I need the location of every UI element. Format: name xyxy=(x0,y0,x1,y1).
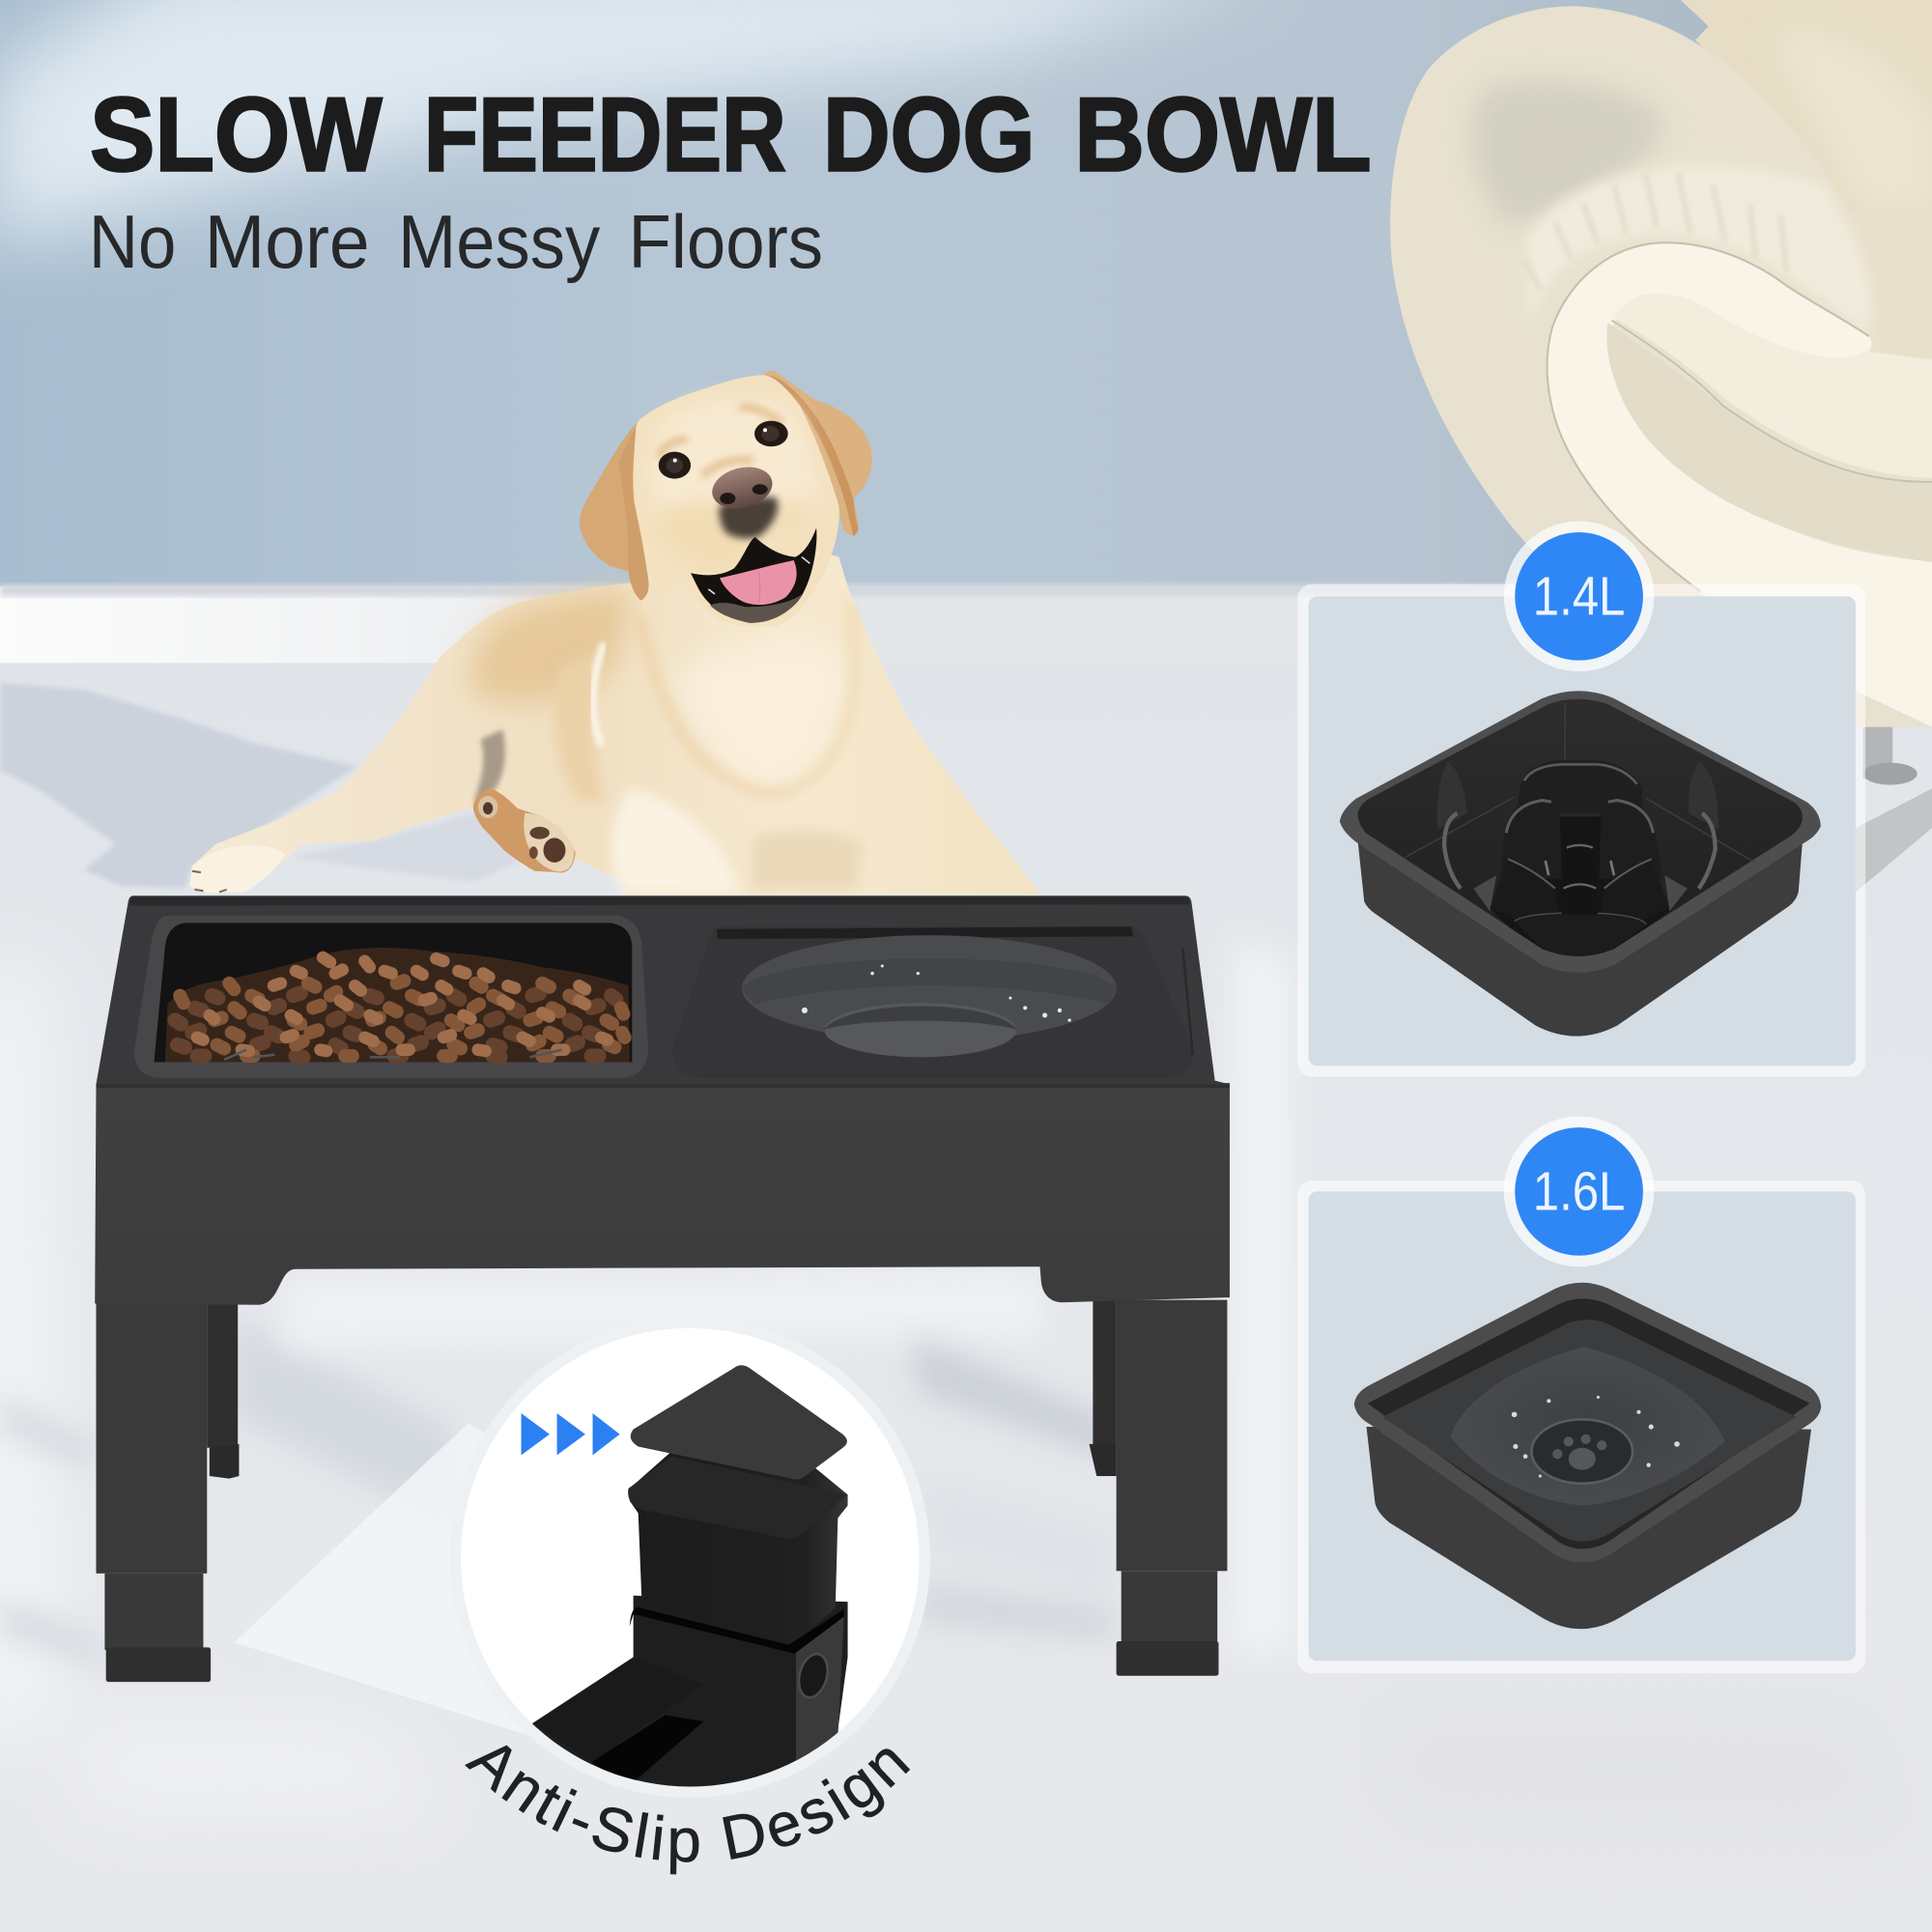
panel: 1.4L bowl xyxy=(1297,522,1865,1077)
title: BOWL xyxy=(1074,76,1372,194)
card frame xyxy=(1297,584,1865,1077)
title: SLOW xyxy=(90,76,382,194)
elevated stand xyxy=(95,895,1230,1682)
dog xyxy=(189,371,1040,895)
stand top surface xyxy=(96,895,1230,1084)
left bowl with kibble xyxy=(134,916,648,1078)
stand back legs xyxy=(207,1300,1117,1479)
right bowl water tray xyxy=(672,926,1193,1078)
stand apron xyxy=(95,1083,1230,1305)
anti-slip pad xyxy=(631,1365,847,1480)
subtitle: No xyxy=(89,201,176,284)
badge: 1.4L: 1.4L xyxy=(1533,565,1625,626)
dog body xyxy=(189,529,1040,895)
badge: 1.4L xyxy=(1504,522,1654,671)
title: FEEDER xyxy=(424,76,786,194)
floor shadow behind dog xyxy=(0,683,357,889)
sofa xyxy=(1390,0,1932,892)
subtitle: Messy xyxy=(398,201,600,284)
badge: 1.6L xyxy=(1504,1117,1654,1266)
beam from callout xyxy=(234,1423,690,1740)
subtitle xyxy=(89,201,823,284)
dog head xyxy=(580,371,872,627)
bowl: slow feeder maze xyxy=(1340,691,1821,1037)
leg detail illustration xyxy=(529,1452,848,1811)
card frame xyxy=(1297,1180,1865,1673)
kibble xyxy=(165,948,630,1062)
title xyxy=(90,76,1372,194)
dog rear paw xyxy=(473,788,576,873)
icon: three blue arrows xyxy=(522,1413,620,1455)
stand front legs xyxy=(96,1300,1227,1682)
subtitle: Floors xyxy=(629,201,823,284)
callout circle xyxy=(450,1318,930,1798)
subtitle: More xyxy=(205,201,370,284)
badge: 1.6L: 1.6L xyxy=(1533,1161,1625,1222)
panel: 1.6L bowl xyxy=(1297,1117,1865,1673)
callout: anti-slip design xyxy=(461,1328,930,1874)
bowl: water insert xyxy=(1354,1283,1821,1629)
callout label: Anti-Slip Design xyxy=(465,1745,910,1874)
title: DOG xyxy=(823,76,1035,194)
